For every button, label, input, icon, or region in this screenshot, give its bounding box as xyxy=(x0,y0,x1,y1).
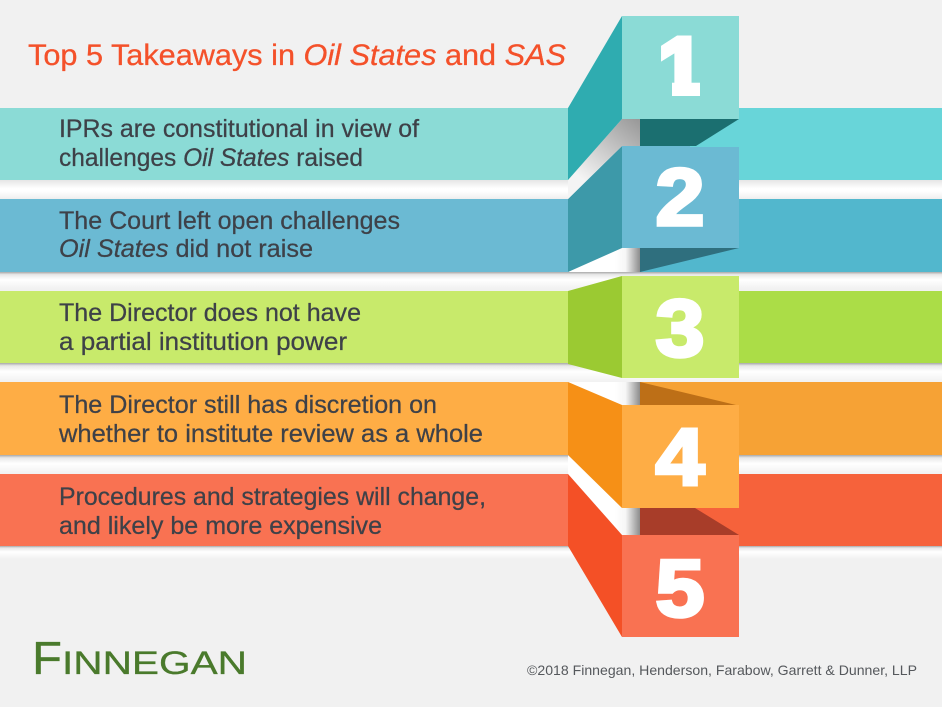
box 1 xyxy=(622,16,739,119)
logo: Finnegan: INNEGAN xyxy=(62,645,247,681)
text 1: IPRs are constitutional in view of xyxy=(59,115,419,143)
ribbon 2 xyxy=(0,146,942,272)
left band 1 xyxy=(0,108,568,180)
ribbon shadows xyxy=(0,180,942,559)
text 3 xyxy=(59,299,361,356)
text 5: Procedures and strategies will change, xyxy=(59,483,486,511)
flap 5 xyxy=(640,508,739,535)
text 2: The Court left open challenges xyxy=(59,207,400,235)
facet 4 xyxy=(568,382,622,508)
ribbon 4 xyxy=(0,382,942,508)
fold shading 5 xyxy=(568,455,640,535)
text 2: Oil States did not raise xyxy=(59,235,313,263)
text 4: whether to institute review as a whole xyxy=(58,420,483,448)
facet 1 xyxy=(568,16,622,180)
left band 5 xyxy=(0,474,568,546)
number 4: 4 xyxy=(656,413,704,503)
number 2: 2 xyxy=(656,153,704,243)
facet 2 xyxy=(568,146,622,272)
number 1: 1 xyxy=(658,22,704,112)
flap 4 xyxy=(640,382,736,405)
ribbon 5 xyxy=(0,455,942,637)
logo: Finnegan xyxy=(32,632,247,684)
left band 3 xyxy=(0,291,568,363)
logo: Finnegan: F xyxy=(32,632,62,684)
number 3: 3 xyxy=(656,284,704,374)
text 3: a partial institution power xyxy=(59,328,347,356)
text 4: The Director still has discretion on xyxy=(59,391,437,419)
box 4 xyxy=(622,405,739,508)
flap 2 xyxy=(640,248,739,272)
box 2 xyxy=(622,146,739,248)
text 1: challenges Oil States raised xyxy=(59,144,363,172)
fold shading 1 xyxy=(568,119,640,199)
number 5: 5 xyxy=(656,544,704,634)
ribbon 3 xyxy=(0,276,942,378)
fold shading 2 xyxy=(568,248,640,272)
box 3 xyxy=(622,276,739,378)
text 2 xyxy=(59,207,400,263)
left band 2 xyxy=(0,199,568,272)
facet 3 xyxy=(568,276,622,378)
text 3: The Director does not have xyxy=(59,299,361,327)
fold shading 4 xyxy=(568,382,640,405)
text 5: and likely be more expensive xyxy=(59,512,382,540)
facet 5 xyxy=(568,474,622,637)
text 1 xyxy=(59,115,419,172)
ribbon 1 xyxy=(0,16,942,199)
flap 1 xyxy=(640,119,739,146)
box 5 xyxy=(622,535,739,637)
title: Top 5 Takeaways in Oil States and SAS xyxy=(28,39,566,72)
copyright: ©2018 Finnegan, Henderson, Farabow, Garrett & Dunner, LLP xyxy=(527,662,917,678)
text 4 xyxy=(58,391,483,448)
text 5 xyxy=(59,483,486,540)
left band 4 xyxy=(0,382,568,455)
